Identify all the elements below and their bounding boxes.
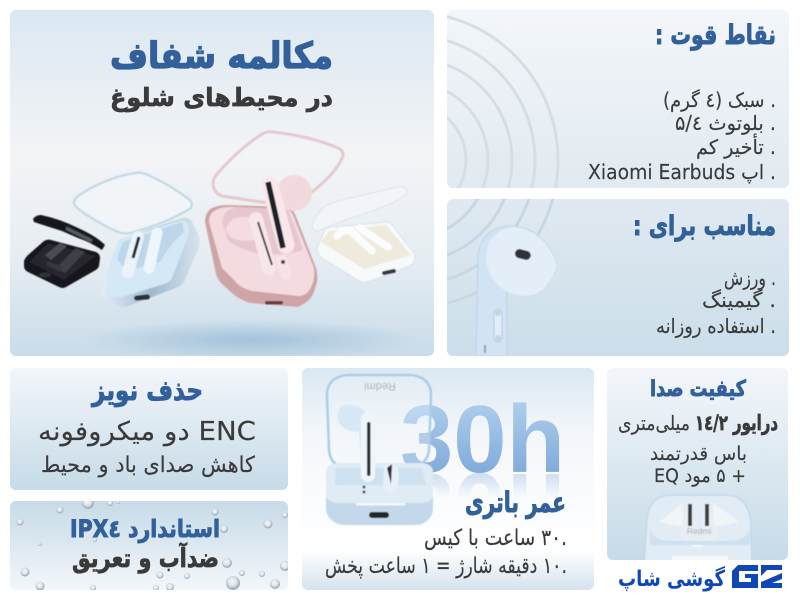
panel: sound quality: [607, 368, 788, 565]
text: dual mic ENC: ENC دو میکروفونه: [38, 417, 256, 447]
list: uses: [656, 266, 776, 338]
heading: clear calls: مکالمه شفاف: [110, 36, 333, 77]
panel: hero: [10, 10, 434, 360]
product: open case: Redmi: [687, 526, 711, 536]
text: waterproof: ضدآب و تعریق: [72, 542, 219, 574]
sound wave rings: [447, 15, 560, 188]
text: 30 hours with case: .۳۰ ساعت با کیس: [424, 526, 567, 551]
panel: noise cancellation: [10, 368, 288, 490]
logo text: گوشی شاپ: [618, 565, 725, 592]
icon: earbud: [476, 226, 557, 356]
panel: battery: [302, 368, 594, 590]
list: strengths: . تأخیر کم: [696, 133, 776, 159]
panel: suitable for: [447, 199, 789, 356]
product: blue case with earbuds: [326, 375, 433, 525]
subheading: noisy environments: در محیط‌های شلوغ: [110, 83, 333, 113]
product: black case: [24, 215, 105, 288]
list: uses: . استفاده روزانه: [656, 314, 776, 338]
list: strengths: . بلوتوث ‪۵/٤‬: [675, 111, 776, 135]
panel: strengths: [447, 10, 789, 188]
heading: sound quality: کیفیت صدا: [650, 377, 746, 402]
big number 30h: [400, 386, 565, 560]
list: strengths: [588, 88, 776, 184]
product: blue case: [74, 173, 200, 307]
text: EQ modes: + ۵ مود EQ: [654, 465, 746, 487]
text: strong bass: باس قدرتمند: [650, 443, 747, 465]
text: driver: میلی‌متری: [618, 411, 690, 435]
text: wind noise: کاهش صدای باد و محیط: [41, 453, 255, 478]
list: uses: . ورزش: [724, 266, 776, 290]
text: driver: [618, 411, 778, 435]
heading: battery life: عمر باتری: [465, 486, 566, 519]
water droplets: [16, 497, 290, 591]
list: strengths: . سبک (٤ گرم): [663, 88, 776, 112]
list: strengths: . اپ Xiaomi Earbuds: [588, 160, 776, 184]
heading: IPX4: استاندارد ‪IPX٤‬: [70, 515, 220, 543]
big number 30h: 30h: [400, 453, 565, 560]
product: open case: [644, 495, 752, 565]
product: blue case with earbuds: Redmi: [364, 380, 396, 392]
panel: water resistance: [10, 497, 290, 591]
text: 10 minutes charge: .۱۰ دقیقه شارژ = ۱ ساعت پخش: [325, 554, 567, 579]
logo mark: [732, 565, 782, 588]
text: driver: درایور ‪۱٤/۲‬: [695, 411, 778, 435]
product: white case: [312, 187, 415, 282]
list: uses: . گیمینگ: [702, 288, 776, 312]
product: pink case: [205, 132, 343, 307]
logo: [618, 565, 782, 592]
big number 30h: 30h: [400, 386, 565, 493]
heading: noise cancellation: حذف نویز: [90, 374, 203, 407]
sound wave rings: [447, 199, 554, 304]
